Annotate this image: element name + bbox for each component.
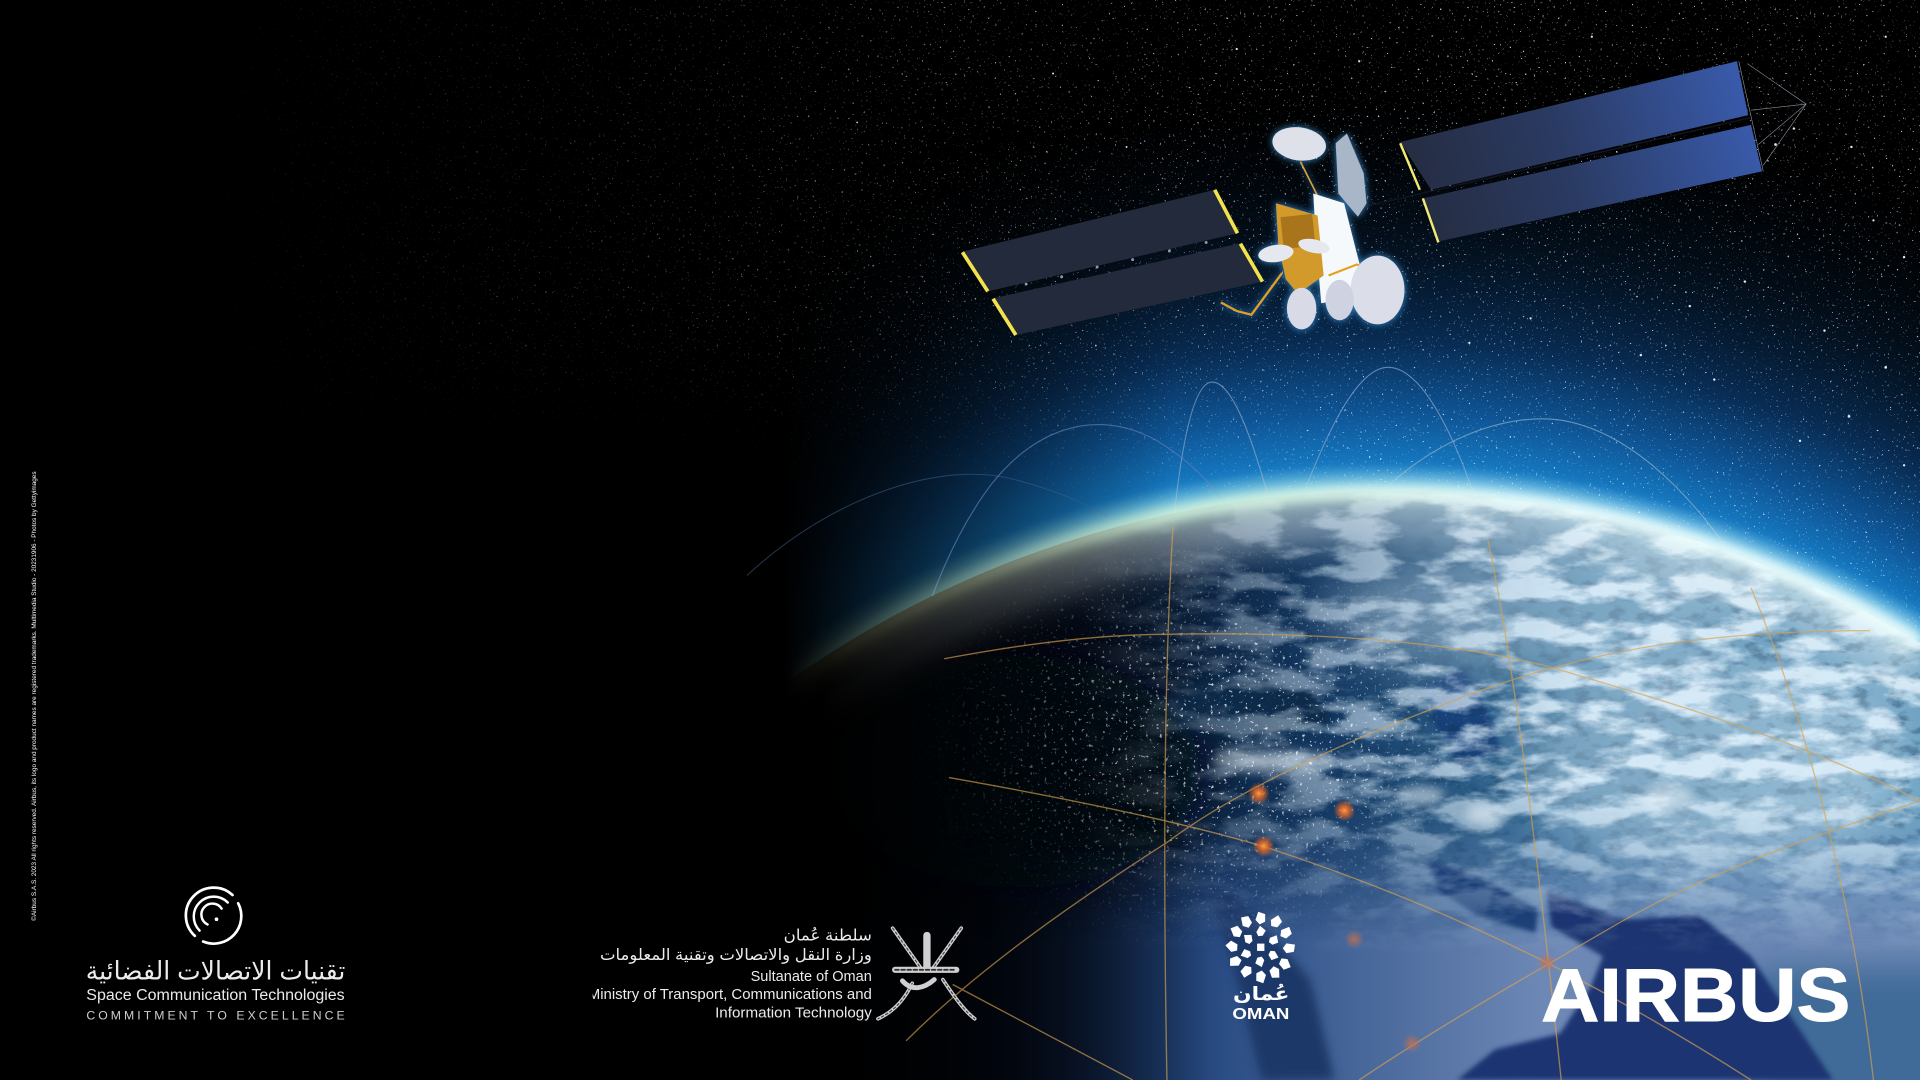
black sea	[1168, 686, 1332, 733]
white haze under the limb	[784, 519, 1920, 713]
ministry text: Sultanate of Oman	[751, 969, 872, 985]
red sea	[1216, 894, 1338, 1080]
ministry text: Ministry of Transport, Communications and	[588, 987, 872, 1003]
atmosphere glow	[800, 162, 1920, 672]
left solar array	[962, 190, 1263, 335]
surface: south lands	[1048, 827, 1920, 1080]
gold network lines	[906, 527, 1920, 1080]
oman wordmark arabic: عُمان	[1233, 983, 1289, 1004]
surface: eastern land tone	[1751, 967, 1920, 1080]
persian gulf	[1427, 860, 1538, 933]
mediterranean sea	[1112, 799, 1184, 850]
satellite	[962, 61, 1806, 335]
tagline: COMMITMENT TO EXCELLENCE	[86, 1008, 345, 1022]
arabian sea	[1457, 890, 1833, 1080]
right solar array	[1347, 61, 1806, 242]
airbus logo: AIRBUS	[1541, 954, 1850, 1038]
ministry text: وزارة النقل والاتصالات وتقنية المعلومات	[600, 947, 872, 965]
ministry text	[588, 927, 873, 1022]
ministry text: Information Technology	[715, 1006, 873, 1022]
earth globe	[854, 492, 1920, 1080]
hotspots	[1248, 782, 1556, 1053]
arabic company name: تقنيات الاتصالات الفضائية	[86, 958, 345, 986]
cloud cover	[1102, 492, 1920, 946]
english company name: Space Communication Technologies	[86, 987, 345, 1004]
caspian sea	[1427, 667, 1500, 769]
footer logo: ministry	[588, 927, 975, 1022]
dark europe	[1056, 666, 1223, 893]
snow and cloud patches	[1212, 751, 1692, 824]
earth night side backing	[453, 492, 1920, 1080]
ministry text: سلطنة عُمان	[784, 927, 872, 944]
limb glow	[784, 492, 1920, 686]
land lights	[930, 534, 1498, 943]
mountain relief	[1392, 513, 1920, 924]
icon: oman emblem	[878, 928, 975, 1019]
icon: radar rings	[186, 888, 241, 944]
copyright line: ©Airbus S.A.S. 2023 All rights reserved. Airbus, its logo and product names are registered trademarks. Multimedia Studio - 20231906 - Photos by Gettyimages	[30, 471, 38, 921]
pale haze on the eastern land	[1322, 551, 1910, 869]
footer logo: Oman	[1225, 911, 1295, 1023]
orbit arcs above the horizon	[747, 367, 1751, 943]
footer logo: Space Communication Technologies	[86, 888, 345, 1022]
icon: petal cluster	[1225, 911, 1295, 983]
star field	[226, 0, 1920, 642]
oman wordmark latin: OMAN	[1232, 1006, 1289, 1023]
spacecraft bus and antennas	[1221, 124, 1404, 329]
